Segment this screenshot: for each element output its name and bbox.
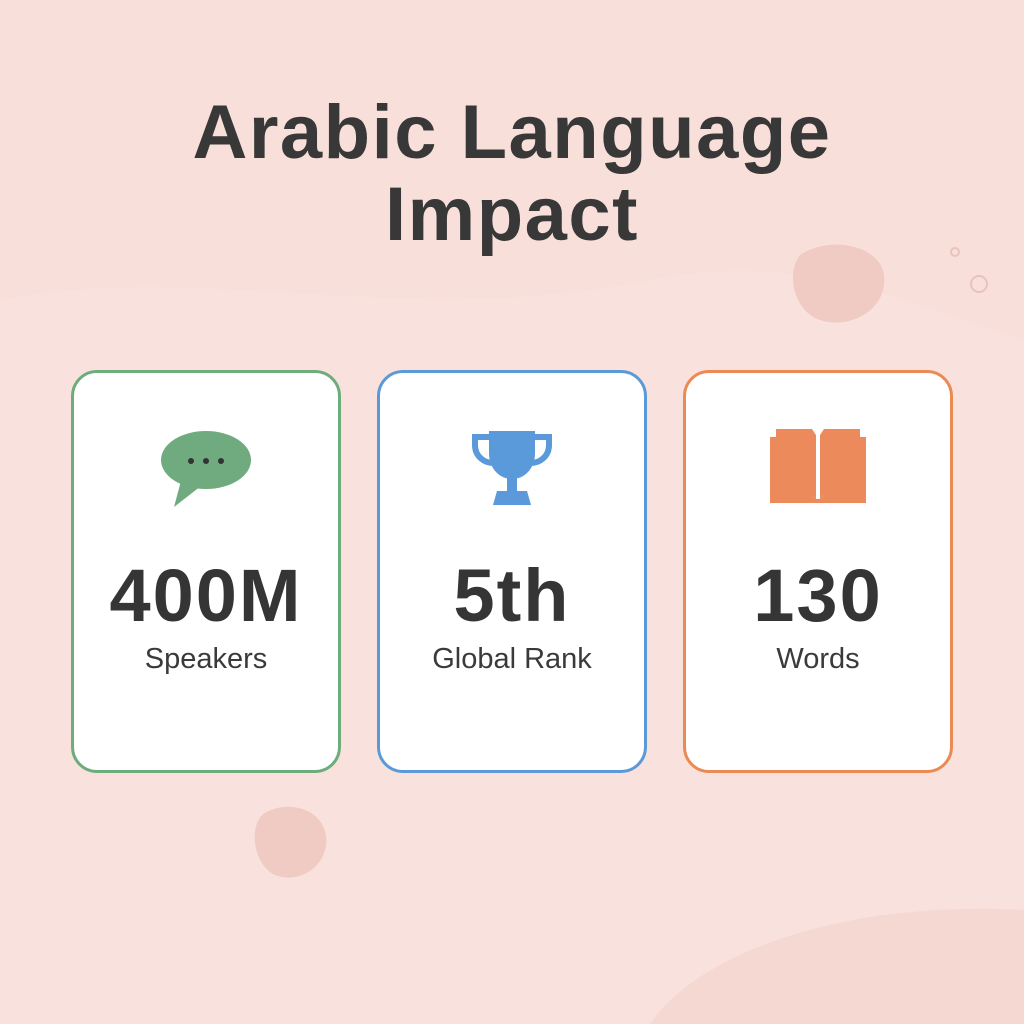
- label: Global Rank: [432, 643, 592, 675]
- label: Speakers: [145, 643, 267, 675]
- panel: global rank: [377, 370, 647, 773]
- stat number: 130: [753, 554, 883, 637]
- icon: trophy: [472, 431, 552, 505]
- title: [192, 90, 832, 257]
- label: Words: [776, 643, 860, 675]
- title: Arabic Language: [192, 90, 832, 175]
- title: Impact: [385, 172, 639, 257]
- panel: speakers: [71, 370, 341, 773]
- stat number: 5th: [454, 554, 570, 637]
- panel: words: [683, 370, 953, 773]
- stat number: 400M: [109, 554, 303, 637]
- icon: open book: [770, 429, 866, 503]
- icon: speech bubble: [161, 431, 251, 507]
